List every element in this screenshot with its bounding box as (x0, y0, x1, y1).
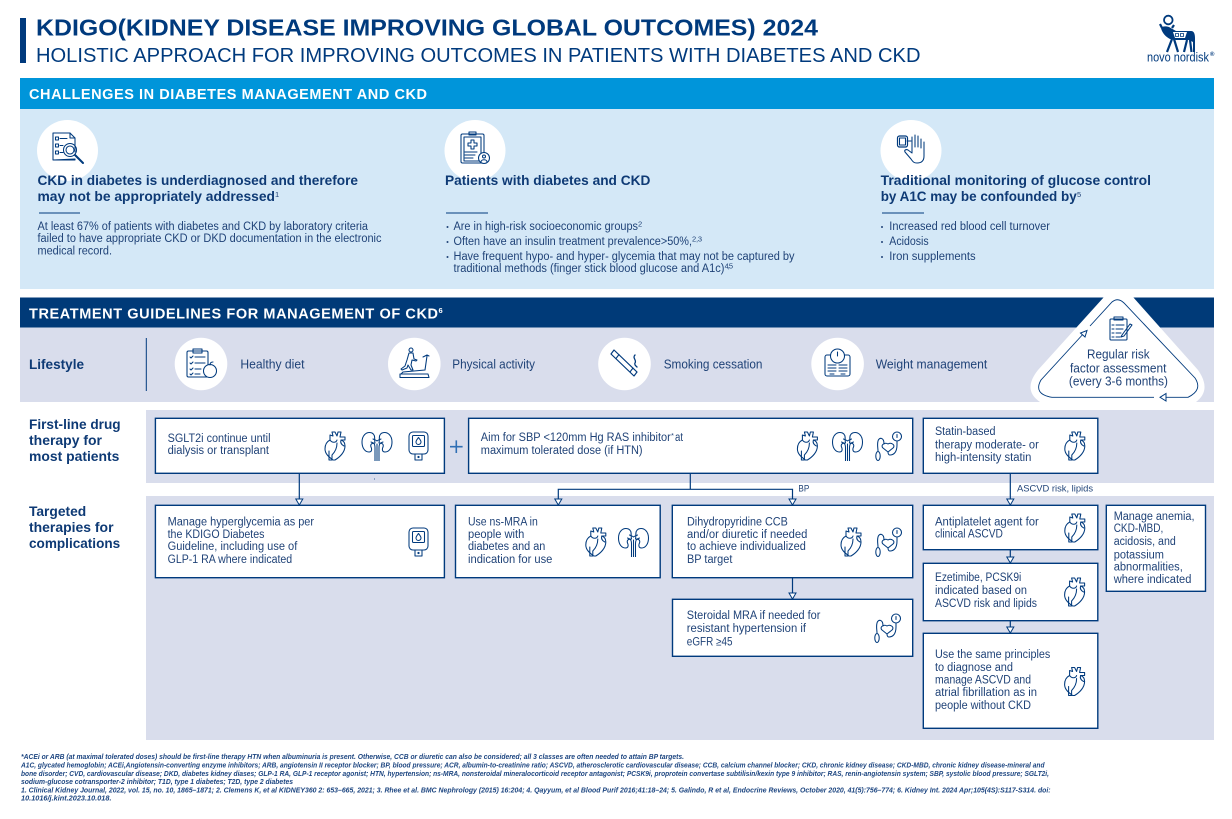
subtitle: HOLISTIC APPROACH FOR IMPROVING OUTCOMES IN PATIENTS WITH DIABETES AND CKD (36, 44, 920, 67)
box: same principles: to diagnose and (935, 662, 1013, 674)
risk assessment text (1069, 347, 1168, 389)
box: manage anemia: potassium (1114, 549, 1164, 561)
plus sign (450, 440, 463, 453)
item: physical activity: Physical activity (452, 357, 536, 371)
box: manage anemia: where indicated (1113, 574, 1191, 586)
panel: targeted background (146, 496, 1214, 740)
icon: heart (1065, 514, 1085, 542)
box: hyperglycemia: GLP-1 RA where indicated (168, 554, 292, 566)
icon: heart (325, 432, 345, 460)
heading bar: treatment guidelines (20, 298, 1214, 328)
bullet list: 2 (638, 220, 642, 228)
icon: blood pressure cuff (875, 614, 900, 642)
heading (38, 173, 358, 204)
box: ns-MRA: diabetes and an (468, 541, 545, 553)
box: antiplatelet (923, 505, 1098, 550)
heading bar: treatment guidelines: 6 (438, 306, 443, 315)
footnotes: bone disorder; CVD, cardiovascular disease; DKD, diabetes kidney diases; GLP-1 RA, GLP-1 receptor agonist; HTN, hypertension; ns-MRA, nonsteroidal mineralocorticoid receptor antagonist; PCSK9i, proprotein convertase subtilisin/kexin type 9 inhibitor; RAS, renin-angiotensin system; SBP, systolic blood pressure; SGLT2i, (21, 771, 1049, 778)
heading (881, 173, 1151, 204)
icon: kidneys (362, 433, 392, 461)
item: smoking cessation: Smoking cessation (664, 357, 763, 371)
icon: heart (1065, 432, 1085, 460)
box: same principles: people without CKD (935, 700, 1031, 712)
icon: kidneys (618, 529, 648, 557)
box: statin: therapy moderate- or (935, 439, 1039, 451)
logo: novo nordisk: ® (1210, 51, 1215, 58)
panel: first-line background (146, 410, 1214, 483)
bullet list: Increased red blood cell turnover (889, 221, 1050, 233)
heading bar: treatment guidelines: TREATMENT GUIDELINES FOR MANAGEMENT OF CKD (29, 306, 438, 322)
icon: blood pressure cuff (876, 528, 902, 556)
item: healthy diet: Healthy diet (240, 357, 305, 371)
box: same principles: manage ASCVD and (935, 675, 1031, 687)
bullet list: Have frequent hypo- and hyper- glycemia that may not be captured by (454, 251, 795, 263)
icon: kidneys (832, 433, 862, 461)
icon: heart (1065, 578, 1085, 606)
box: same principles: atrial fibrillation as in (935, 687, 1037, 699)
panel: lifestyle (20, 328, 1214, 402)
footnotes: 1. Clinical Kidney Journal, 2022, vol. 15, no. 10, 1865–1871; 2. Clemens K, et al KIDNEY360 2: 653–665, 2021; 3. Rhee et al. BMC Nephrology (2015) 16:204; 4. Qayyum, et al Blood Purif 2016;41:18–24; 5. Galindo, R et al, Endocrine Reviews, October 2020, 41(5):756–774; 6. Kidney Int. 2024 Apr;105(4S):S117-S314. doi: (21, 788, 1051, 794)
box: hyperglycemia (155, 505, 444, 578)
box: RAS inhibitor: maximum tolerated dose (if HTN) (481, 445, 643, 457)
icon: blood pressure cuff (876, 432, 902, 460)
box: manage anemia: abnormalities, (1114, 561, 1183, 573)
box: ns-MRA: indication for use (468, 554, 552, 566)
item: smoking cessation (598, 338, 763, 390)
challenge column 2 (444, 120, 795, 275)
box: steroidal MRA: Steroidal MRA if needed for (687, 610, 821, 622)
box: RAS inhibitor: Aim for SBP <120mm Hg RAS inhibitor (481, 432, 671, 444)
bullet list (446, 220, 795, 275)
heading: Traditional monitoring of glucose control (881, 173, 1151, 188)
box: ns-MRA: people with (468, 529, 524, 541)
item: weight management (811, 338, 988, 390)
heading bar: challenges (20, 78, 1214, 109)
box: SGLT2i (155, 418, 444, 473)
heading: Patients with diabetes and CKD (445, 173, 650, 188)
body text: At least 67% of patients with diabetes and CKD by laboratory criteria (38, 221, 369, 233)
heading: 5 (1077, 190, 1081, 199)
icon: heart (841, 528, 861, 556)
footnotes: A1C, glycated hemoglobin; ACEi,Angiotensin-converting enzyme inhibitors; ARB, angiotensin II receptor blocker; BP, blood pressure; ACR, albumin-to-creatinine ratio; ASCVD, atherosclerotic cardiovascular disease; CCB, calcium channel blocker; CKD, chronic kidney disease; CKD-MBD, chronic kidney disease-mineral and (20, 762, 1045, 770)
regular risk factor assessment (1030, 297, 1205, 402)
logo: novo nordisk: novo nordisk (1147, 50, 1209, 65)
connector label: ASCVD risk, lipids: ASCVD risk, lipids (1017, 484, 1094, 494)
row label: first-line (29, 417, 121, 465)
box: steroidal MRA (672, 599, 913, 656)
box: hyperglycemia: Manage hyperglycemia as per (168, 516, 314, 528)
icon: heart (1065, 668, 1085, 696)
box: RAS inhibitor: * (671, 431, 674, 440)
box: antiplatelet: Antiplatelet agent for (935, 516, 1039, 528)
challenge column 1 (37, 120, 382, 258)
body text: failed to have appropriate CKD or DKD documentation in the electronic (38, 233, 382, 245)
row label: targeted: Targeted (29, 504, 86, 520)
connector label: BP: BP (798, 484, 809, 494)
box: statin: Statin-based (935, 426, 996, 438)
box: steroidal MRA: eGFR ≥45 (687, 636, 732, 648)
title block (20, 15, 920, 67)
icon: heart (586, 528, 606, 556)
row label: targeted (29, 504, 120, 552)
row label: targeted: therapies for (29, 520, 114, 536)
icon: clipboard with patient (444, 120, 506, 181)
box: manage anemia: Manage anemia, (1114, 511, 1194, 523)
box: ezetimibe: indicated based on (935, 585, 1027, 597)
box: ns-MRA: Use ns-MRA in (468, 516, 538, 528)
box: same principles: Use the same principles (935, 649, 1051, 661)
box: manage anemia (1106, 505, 1206, 591)
row label: first-line: therapy for (29, 433, 102, 449)
row label: targeted: complications (29, 536, 120, 552)
heading bar: challenges: CHALLENGES IN DIABETES MANAGEMENT AND CKD (29, 87, 427, 103)
title: KDIGO(KIDNEY DISEASE IMPROVING GLOBAL OUTCOMES) 2024 (36, 15, 818, 41)
icon: document with magnifier (37, 120, 98, 181)
icon: glucose meter (409, 432, 428, 460)
icon: heart (797, 432, 817, 460)
box: dihydropyridine CCB (672, 505, 913, 578)
box: hyperglycemia: the KDIGO Diabetes (168, 529, 265, 541)
row label: first-line: most patients (29, 449, 120, 465)
bullet list: Often have an insulin treatment prevalence>50%, (454, 236, 692, 248)
box: dihydropyridine CCB: to achieve individualized (687, 541, 806, 553)
bullet list: traditional methods (finger stick blood glucose and A1c) (454, 263, 725, 275)
logo: novo nordisk (1147, 16, 1215, 65)
bullet list: Acidosis (889, 236, 929, 248)
footnotes: *ACEi or ARB (at maximal tolerated doses) should be first-line therapy HTN when albuminuria is present. Otherwise, CCB or diuretic can also be considered; all 3 classes are often needed to attain BP targets. (21, 754, 684, 761)
box: SGLT2i: dialysis or transplant (168, 445, 270, 457)
risk assessment text: (every 3-6 months) (1069, 375, 1168, 389)
item: physical activity (388, 338, 536, 390)
bullet list (881, 221, 1050, 263)
connectors (296, 473, 1014, 633)
item: weight management: Weight management (876, 357, 988, 371)
heading: may not be appropriately addressed (38, 189, 275, 204)
box: dihydropyridine CCB: BP target (687, 554, 733, 566)
box: SGLT2i: SGLT2i continue until (168, 433, 270, 445)
row label: first-line: First-line drug (29, 417, 121, 433)
box: antiplatelet: clinical ASCVD (935, 528, 1003, 540)
risk assessment text: Regular risk (1087, 347, 1150, 361)
heading: 1 (275, 190, 279, 199)
box: same principles (923, 633, 1098, 728)
body text (38, 221, 382, 258)
box: manage anemia: CKD-MBD, (1114, 523, 1163, 535)
footnotes (20, 754, 1051, 802)
icon: hand with glucose meter (880, 120, 942, 181)
box: dihydropyridine CCB: Dihydropyridine CCB (687, 516, 788, 528)
box: RAS inhibitor: at (675, 432, 684, 444)
box: manage anemia: acidosis, and (1114, 536, 1176, 548)
risk assessment text: factor assessment (1070, 361, 1167, 375)
icon: glucose meter (409, 528, 428, 556)
box: statin (923, 418, 1098, 473)
box: ezetimibe: ASCVD risk and lipids (935, 598, 1037, 610)
heading: CKD in diabetes is underdiagnosed and therefore (38, 173, 358, 188)
bullet list: 2,3 (692, 234, 702, 244)
box: steroidal MRA: resistant hypertension if (687, 623, 807, 635)
footnotes: 10.1016/j.kint.2023.10.018. (21, 796, 112, 802)
box: ezetimibe (923, 563, 1098, 621)
bullet list: 4,5 (725, 262, 733, 270)
item: healthy diet (175, 338, 305, 390)
box: dihydropyridine CCB: and/or diuretic if needed (687, 529, 807, 541)
panel: challenges (20, 78, 1214, 289)
bullet list: Are in high-risk socioeconomic groups (454, 221, 638, 233)
heading: by A1C may be confounded by (881, 189, 1077, 204)
box: hyperglycemia: Guideline, including use of (168, 541, 298, 553)
icon: checklist clipboard (1110, 317, 1132, 340)
box: ezetimibe: Ezetimibe, PCSK9i (935, 572, 1021, 584)
body text: medical record. (38, 246, 112, 258)
footnotes: sodium-glucose cotransporter-2 inhibitor; T1D, type 1 diabetes; T2D, type 2 diabetes (21, 779, 293, 786)
box: ns-MRA (456, 505, 660, 578)
box: statin: high-intensity statin (935, 452, 1031, 464)
lifestyle label: Lifestyle (29, 357, 84, 373)
challenge column 3 (880, 120, 1151, 263)
box: RAS inhibitor (469, 418, 913, 473)
bullet list: Iron supplements (889, 251, 976, 263)
